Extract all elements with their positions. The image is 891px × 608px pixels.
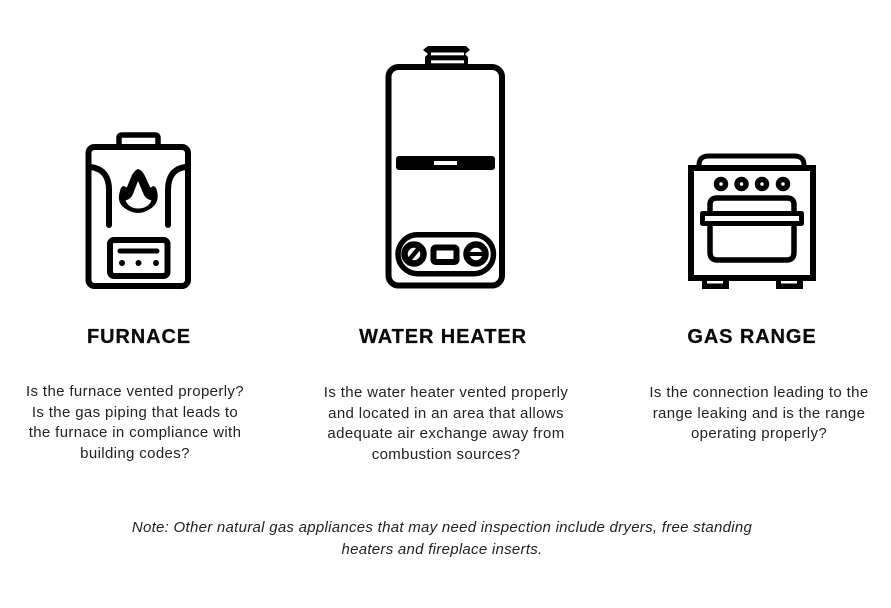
- note: [132, 519, 752, 558]
- icon: water heater: [388, 46, 502, 286]
- text: furnace question: building codes?: [80, 445, 190, 462]
- text: water heater question: combustion sources?: [372, 446, 520, 463]
- note: heaters and fireplace inserts.: [341, 540, 542, 558]
- heading: water heater: WATER HEATER: [359, 326, 527, 348]
- note: Note: Other natural gas appliances that may need inspection include dryers, free standing: [132, 519, 752, 536]
- text: furnace question: [26, 383, 244, 462]
- text: water heater question: [324, 384, 568, 463]
- heading: gas range: GAS RANGE: [687, 326, 817, 348]
- text: water heater question: and located in an area that allows: [328, 405, 564, 422]
- icon: furnace: [88, 135, 188, 286]
- icon: gas range: [691, 156, 813, 289]
- text: water heater question: Is the water heater vented properly: [324, 384, 568, 401]
- text: water heater question: adequate air exchange away from: [327, 425, 565, 442]
- text: furnace question: Is the gas piping that leads to: [32, 404, 238, 421]
- text: gas range question: operating properly?: [691, 425, 827, 442]
- text: gas range question: Is the connection leading to the: [649, 384, 869, 401]
- text: furnace question: Is the furnace vented properly?: [26, 383, 244, 400]
- heading: furnace: FURNACE: [87, 326, 191, 348]
- text: furnace question: the furnace in compliance with: [29, 424, 241, 441]
- text: gas range question: [649, 384, 869, 442]
- text: gas range question: range leaking and is the range: [653, 405, 865, 422]
